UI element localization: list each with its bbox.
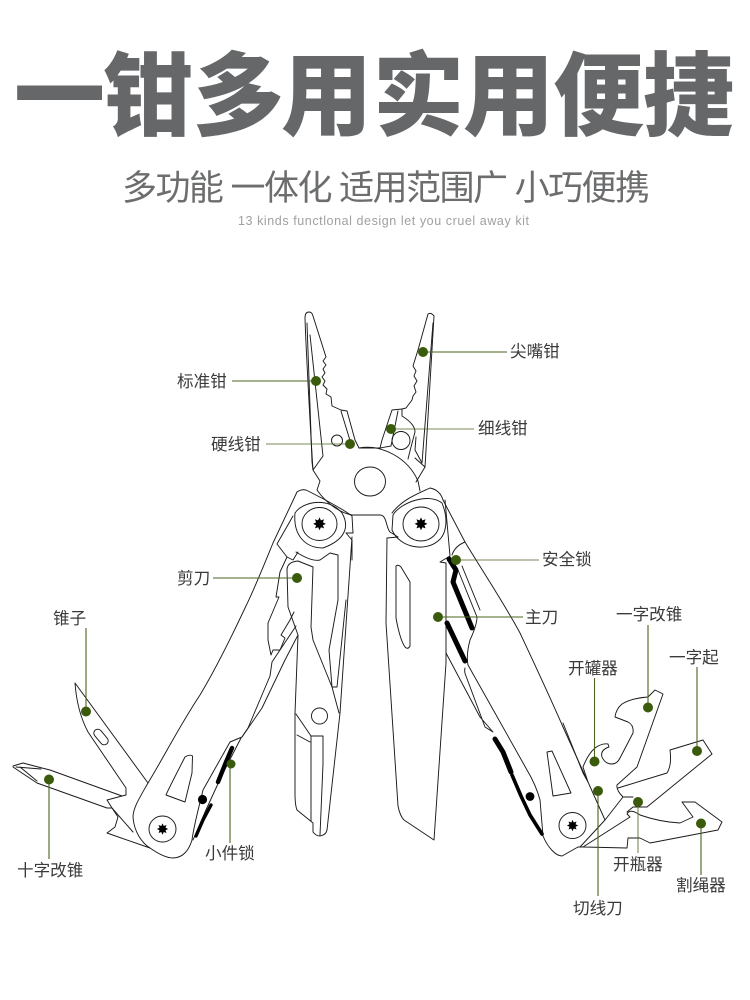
label: 尖嘴钳 [418, 342, 560, 361]
label: 硬线钳: 硬线钳 [211, 435, 261, 454]
left pivot [295, 490, 353, 560]
subtitle: 多功能 一体化 适用范围广 小巧便携 [122, 169, 650, 208]
left handle [133, 492, 298, 858]
flat driver and bottle opener [618, 740, 712, 812]
label: 细线钳 [386, 419, 528, 438]
label: 标准钳 [177, 372, 321, 391]
phillips screwdriver [13, 763, 150, 848]
label: 一字改锥 [616, 605, 682, 712]
left handle: ✸ [156, 820, 169, 838]
label: 锥子: 锥子 [53, 609, 86, 628]
right pivot: ✸ [414, 515, 428, 535]
label: 尖嘴钳: 尖嘴钳 [510, 342, 560, 361]
label: 锥子 [53, 609, 91, 716]
label: 开罐器 [568, 659, 618, 766]
label: 十字改锥: 十字改锥 [17, 861, 83, 880]
right handle: ✸ [566, 817, 579, 835]
label: 开瓶器: 开瓶器 [613, 855, 663, 874]
flat screwdriver and can opener [583, 690, 663, 820]
label: 标准钳: 标准钳 [177, 372, 227, 391]
scissors [287, 537, 352, 836]
label: 细线钳: 细线钳 [478, 419, 528, 438]
label: 主刀 [433, 608, 558, 627]
jaw pivot body [313, 447, 420, 537]
label: 割绳器: 割绳器 [676, 876, 726, 895]
left pivot: ✸ [312, 515, 327, 535]
label: 切线刀: 切线刀 [573, 899, 623, 918]
left jaw [305, 312, 380, 470]
right jaw [380, 313, 434, 482]
english tagline: 13 kinds functlonal design let you cruel away kit [238, 214, 530, 228]
label: 小件锁: 小件锁 [205, 844, 255, 863]
label: 开罐器: 开罐器 [568, 659, 618, 678]
label: 一字起 [669, 648, 719, 756]
label: 剪刀: 剪刀 [177, 569, 210, 588]
label: 一字改锥: 一字改锥 [616, 605, 682, 624]
label: 小件锁 [205, 760, 255, 863]
title: 一钳多用实用便捷 [14, 47, 734, 148]
label: 硬线钳 [211, 435, 355, 454]
label: 开瓶器 [613, 797, 663, 874]
awl [75, 683, 148, 796]
label: 主刀: 主刀 [525, 608, 558, 627]
main knife [386, 537, 450, 840]
label: 切线刀 [573, 786, 623, 918]
right handle [443, 500, 605, 856]
label: 一字起: 一字起 [669, 648, 719, 667]
right pivot [392, 488, 446, 547]
label: 安全锁: 安全锁 [542, 550, 592, 569]
cord cutter [583, 802, 722, 848]
label: 十字改锥 [17, 774, 83, 880]
label: 割绳器 [676, 818, 726, 895]
label: 剪刀 [177, 569, 302, 588]
label: 安全锁 [451, 550, 592, 569]
multi-tool line drawing [13, 312, 722, 858]
